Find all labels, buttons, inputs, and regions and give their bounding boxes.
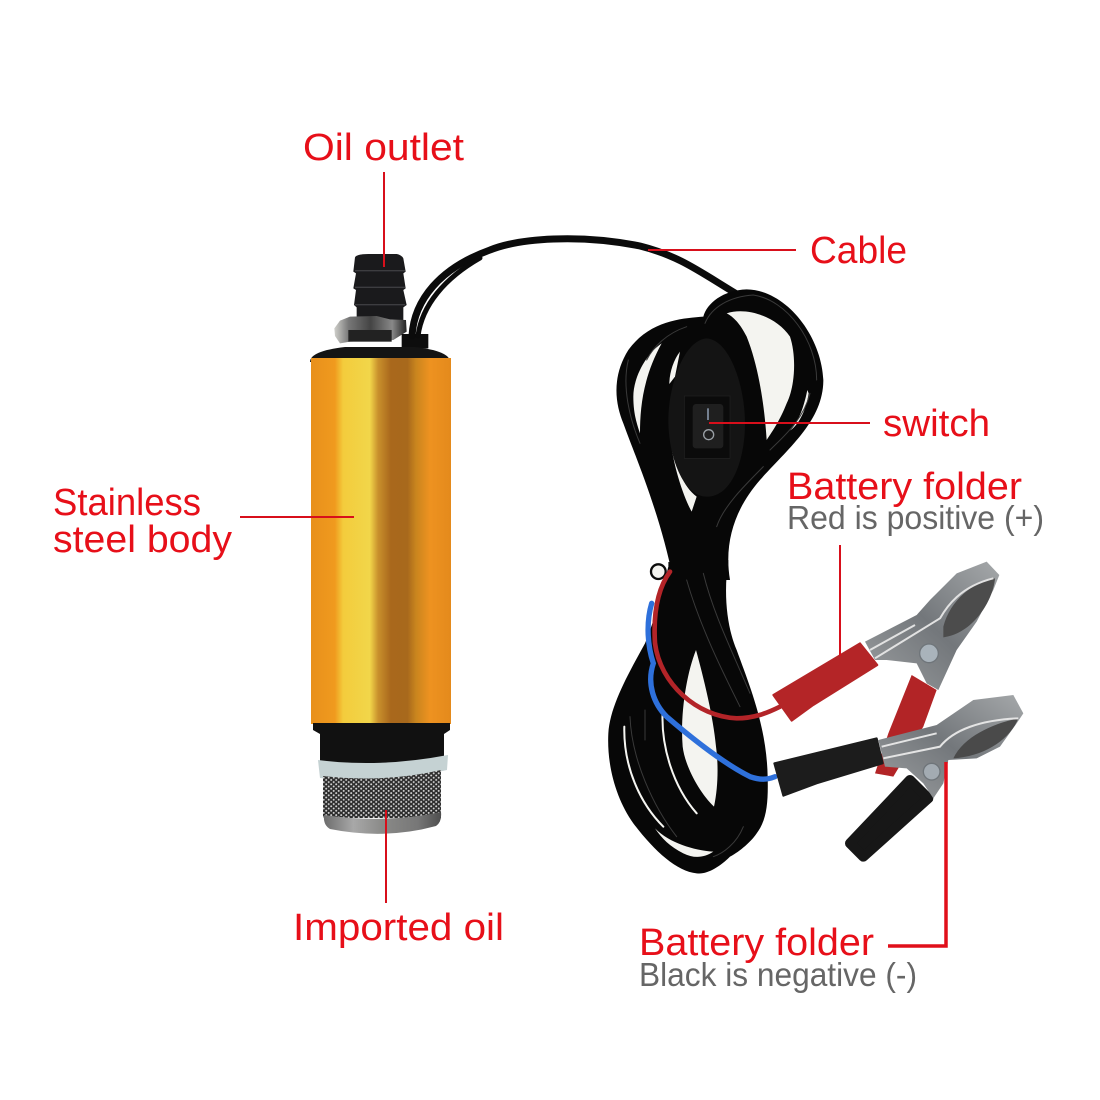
red positive clip [773, 562, 999, 777]
small wire loop [651, 564, 666, 579]
callout: battery folder negative [639, 762, 946, 993]
battery clips [773, 562, 1023, 857]
callout: battery folder positive [787, 466, 1044, 656]
callout: stainless steel body: Stainless [53, 482, 201, 524]
red wire [655, 572, 780, 718]
pump: mesh strainer [323, 770, 441, 818]
lower cable loop [608, 560, 780, 874]
callout: cable: Cable [810, 230, 907, 272]
callout: oil outlet: Oil outlet [303, 127, 464, 169]
pump: top cap [310, 347, 450, 362]
callout: battery folder positive: Red is positive (+) [787, 499, 1044, 536]
cable tie [668, 557, 728, 570]
pump: steel base [324, 812, 441, 834]
callout: battery folder positive: Battery folder [787, 466, 1022, 508]
callout: battery folder negative: Black is negative (-) [639, 956, 917, 993]
switch body [668, 338, 745, 497]
pump [310, 254, 451, 834]
callout: stainless steel body: steel body [53, 519, 232, 561]
cable from pump to switch [412, 239, 740, 336]
switch rocker [693, 404, 723, 448]
callout: battery folder negative: Battery folder [639, 922, 874, 964]
callout: stainless steel body [53, 482, 354, 561]
black negative clip [774, 695, 1023, 857]
upper cable loop [616, 289, 823, 580]
blue wire [648, 603, 775, 779]
pump: stainless steel body [311, 358, 451, 724]
switch frame [684, 396, 730, 458]
callout: imported oil: Imported oil [293, 907, 504, 949]
cable coil with switch [608, 289, 823, 874]
pump: white ring [318, 755, 448, 780]
pump: lower collar [313, 723, 450, 765]
callout: switch: switch [883, 403, 990, 445]
pump: oil outlet barb and clamp [334, 254, 428, 348]
